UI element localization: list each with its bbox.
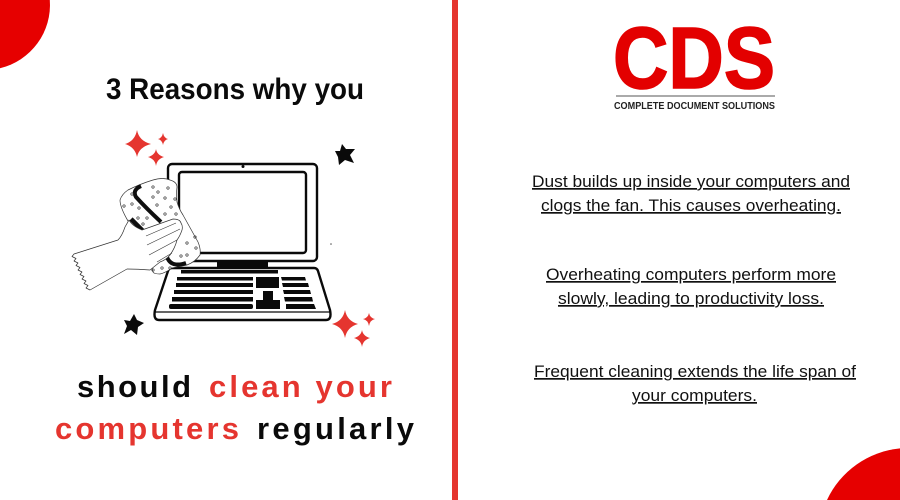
- heading: top line: 3 Reasons why you: [106, 73, 364, 106]
- text block: reason 2: [546, 265, 836, 308]
- illustration: laptop being cleaned: [72, 164, 331, 320]
- heading word: computers: computers: [55, 411, 239, 446]
- icon: laptop: [154, 164, 331, 320]
- heading: lower lines: [55, 369, 415, 446]
- icon: red sparkles bottom: [332, 310, 375, 347]
- corner circle: bottom right: [827, 448, 900, 500]
- vertical divider: [452, 0, 458, 500]
- text block: reason 1: clogs the fan. This causes overheating.: [541, 196, 841, 215]
- icon: gloved hand: [72, 219, 182, 290]
- logo letters: CDS: [613, 10, 775, 107]
- icon: red sparkles top: [125, 130, 168, 166]
- text block: reason 2: slowly, leading to productivity loss.: [558, 289, 824, 308]
- logo tagline: COMPLETE DOCUMENT SOLUTIONS: [614, 101, 775, 112]
- text block: reason 3: your computers.: [632, 386, 757, 405]
- icon: sponge: [120, 178, 200, 274]
- heading words: clean your: clean your: [209, 369, 392, 404]
- heading word: regularly: regularly: [257, 411, 415, 446]
- heading word: should: should: [77, 369, 191, 404]
- corner circle: top left: [0, 0, 50, 68]
- text block: reason 1: [532, 172, 850, 215]
- icon: black star top right: [335, 144, 355, 165]
- logo: CDS: [613, 10, 775, 112]
- text block: reason 1: Dust builds up inside your computers and: [532, 172, 850, 191]
- text block: reason 2: Overheating computers perform more: [546, 265, 836, 284]
- small dot: [330, 243, 332, 245]
- text block: reason 3: [534, 362, 856, 405]
- icon: black star bottom left: [124, 314, 144, 335]
- text block: reason 3: Frequent cleaning extends the life span of: [534, 362, 856, 381]
